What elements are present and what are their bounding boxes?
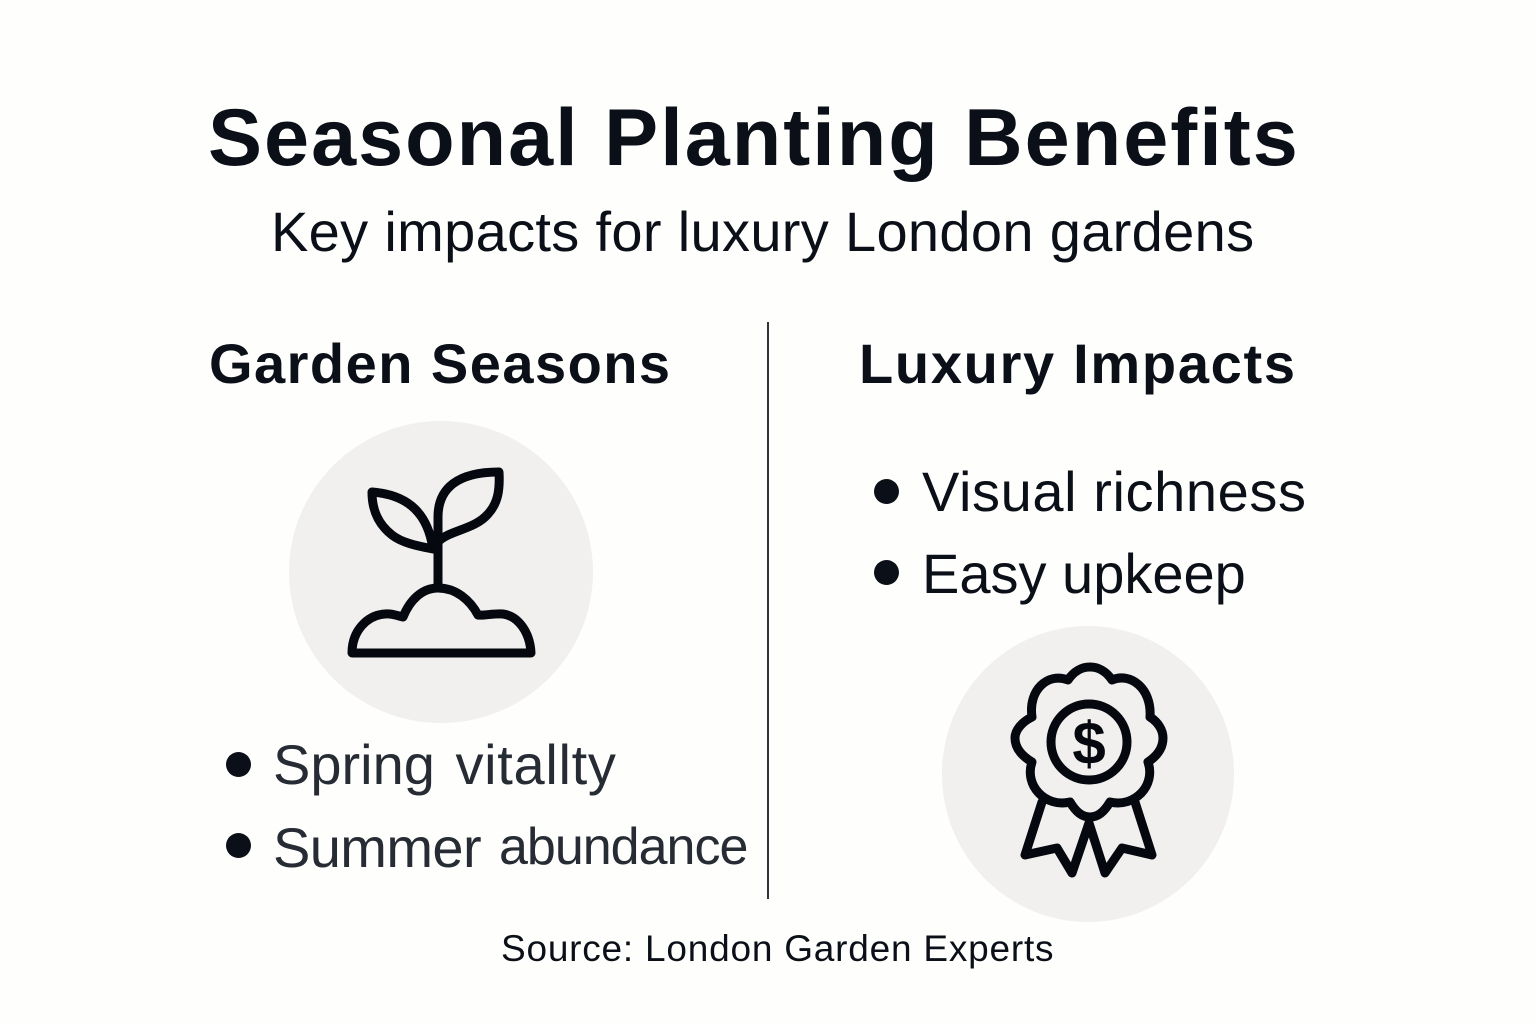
list: garden seasons [226, 733, 747, 879]
list: luxury impacts [874, 460, 1307, 605]
title: Seasonal Planting Benefits [208, 93, 1300, 183]
text: visual: Visual richness [922, 460, 1307, 523]
text: spring: Spring vitallty [273, 733, 617, 796]
text: abundance: abundance [499, 818, 747, 876]
bullet: visual [874, 479, 899, 504]
text: summer: Summer [273, 816, 481, 879]
subtitle: Key impacts for luxury London gardens [271, 200, 1254, 263]
bullet: summer [226, 833, 251, 858]
heading: Garden Seasons: Garden Seasons [209, 332, 672, 395]
text: upkeep: Easy upkeep [922, 542, 1246, 605]
center divider [767, 322, 768, 899]
bullet: upkeep [874, 560, 899, 585]
bullet: spring [226, 752, 251, 777]
source: Source: London Garden Experts [501, 928, 1054, 969]
heading: Luxury Impacts: Luxury Impacts [859, 332, 1297, 395]
icon: rosette with dollar in circle [942, 626, 1234, 922]
icon: seedling in circle [289, 421, 593, 723]
dollar sign: $ [1072, 710, 1106, 777]
